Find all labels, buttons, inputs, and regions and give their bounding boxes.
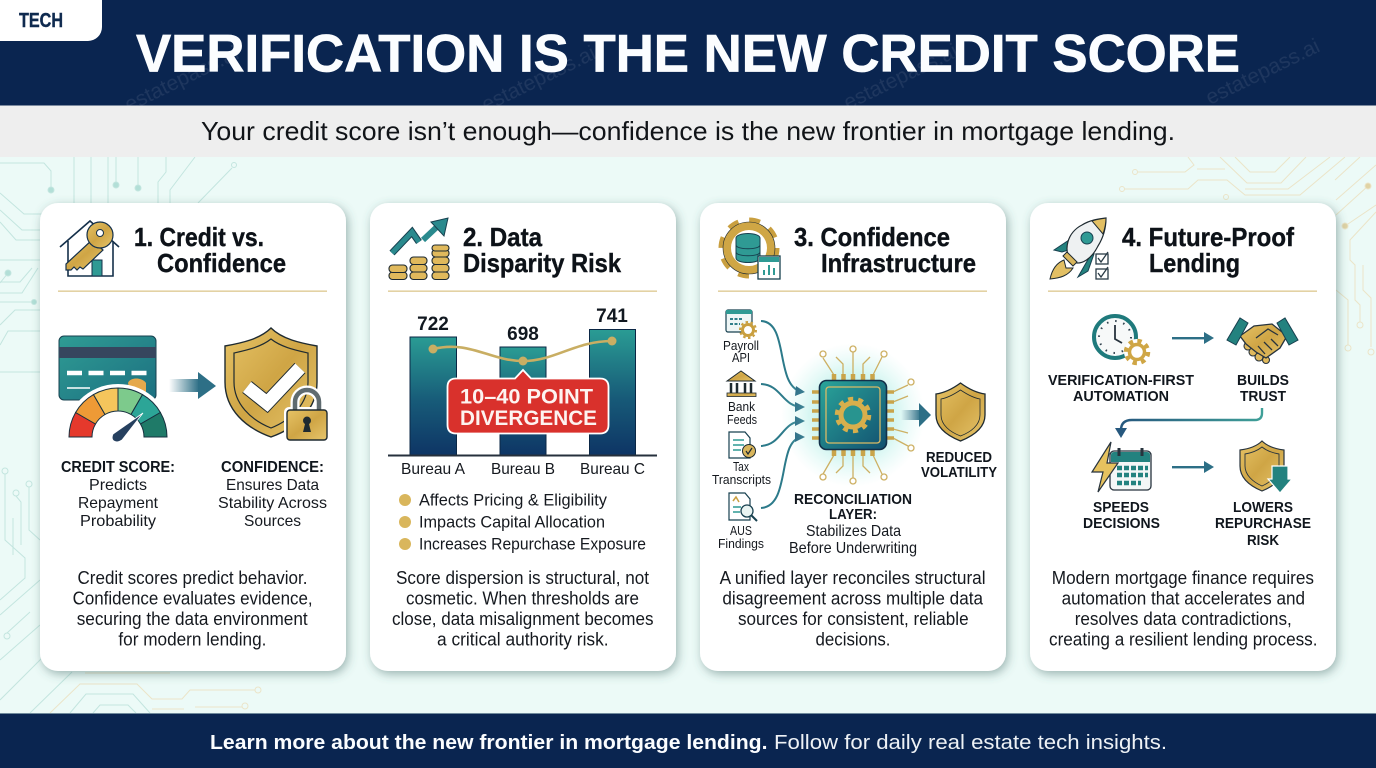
labels: automation and trust: AUTOMATION (1073, 388, 1169, 405)
icon: bank feeds: Feeds (727, 412, 757, 427)
background circuit traces, gold right (50, 157, 1376, 713)
text block 4 (1049, 568, 1318, 650)
label: confidence: Ensures Data (226, 477, 319, 494)
arrows: inputs to chip (761, 321, 805, 508)
label: reconciliation layer (789, 491, 917, 557)
category tab: TECH (0, 0, 102, 41)
label: reconciliation layer: Before Underwriting (789, 540, 917, 557)
label: credit score (61, 459, 175, 530)
bar chart: Bureau B (491, 461, 555, 478)
label: credit score: Probability (80, 513, 156, 530)
watermarks: estatepass.ai (121, 42, 242, 116)
divider (58, 290, 327, 292)
chip: reconciliation layer (781, 343, 925, 487)
watermarks: estatepass.ai (478, 42, 599, 116)
label: confidence: Sources (244, 513, 301, 530)
bullet list: Impacts Capital Allocation (419, 514, 605, 532)
text block 2 (392, 568, 654, 650)
arrow: connector back to second row (1115, 408, 1262, 438)
labels: speeds and lowers: RISK (1247, 532, 1279, 549)
text block 2: close, data misalignment becomes (392, 609, 654, 629)
divider (388, 290, 657, 292)
panel 3: confidence infrastructure (700, 203, 1006, 671)
icon: rocket and checklist (1050, 218, 1108, 279)
icon: AUS findings: Findings (718, 536, 764, 551)
text block 2: cosmetic. When thresholds are (406, 588, 639, 608)
watermarks (121, 35, 1323, 116)
heading 2: 2. Data (463, 222, 542, 252)
text block 3: decisions. (816, 630, 890, 650)
label: reduced volatility: REDUCED (926, 449, 992, 466)
bar chart: 722 (417, 314, 449, 335)
label: reconciliation layer: LAYER: (829, 506, 877, 523)
subtitle band (0, 106, 1376, 157)
icon: payroll API (723, 310, 759, 365)
heading 1: Confidence (157, 248, 286, 278)
icon: AUS findings (718, 493, 764, 551)
bar chart: 741 (596, 306, 628, 327)
labels: automation and trust: BUILDS (1237, 372, 1289, 389)
icon: house and key (60, 221, 119, 276)
background circuit traces, teal left (0, 157, 236, 713)
labels: automation and trust: VERIFICATION-FIRST (1048, 372, 1194, 389)
icon: bank feeds (727, 371, 757, 427)
title: VERIFICATION IS THE NEW CREDIT SCORE (136, 25, 1240, 84)
text block 1 (73, 568, 313, 650)
heading 3: Infrastructure (821, 248, 976, 278)
heading 2: Disparity Risk (463, 248, 621, 278)
bar chart (388, 306, 657, 478)
header band (0, 0, 1376, 106)
labels: automation and trust (1048, 372, 1289, 405)
text block 3: A unified layer reconciles structural (720, 568, 986, 588)
label: confidence: Stability Across (218, 495, 327, 512)
text block 1: securing the data environment (77, 609, 308, 629)
label: reconciliation layer: RECONCILIATION (794, 491, 912, 508)
icon: lightning and calendar (1092, 442, 1151, 492)
heading 2 (463, 222, 621, 278)
heading 4 (1122, 222, 1294, 278)
watermarks: estatepass.ai (840, 40, 961, 114)
text block 2: Score dispersion is structural, not (396, 568, 649, 588)
icon: shield (936, 383, 985, 441)
icon: gear with database (722, 221, 780, 279)
labels: speeds and lowers: SPEEDS (1093, 499, 1149, 516)
icon: tax transcripts: Transcripts (712, 472, 771, 487)
bullet list: Affects Pricing & Eligibility (419, 492, 608, 510)
arrow: chip to shield (901, 403, 931, 427)
panel 1: credit vs confidence (40, 203, 346, 671)
label: reconciliation layer: Stabilizes Data (806, 523, 901, 540)
label: reduced volatility (921, 449, 997, 481)
label: reduced volatility: VOLATILITY (921, 464, 997, 481)
subtitle: Your credit score isn’t enough—confidence is the new frontier in mortgage lending. (201, 116, 1175, 146)
arrow (1172, 461, 1214, 473)
text block 4: Modern mortgage finance requires (1052, 568, 1314, 588)
page background (0, 157, 1376, 713)
icon: tax transcripts: Tax (733, 459, 749, 474)
icon: coins and rising arrow (389, 218, 449, 280)
labels: speeds and lowers (1083, 499, 1311, 549)
divider (1048, 290, 1317, 292)
icon: gold shield with check and lock (225, 328, 330, 443)
label: credit score: CREDIT SCORE: (61, 459, 175, 476)
label: credit score: Predicts (89, 477, 147, 494)
text block 3 (720, 568, 986, 650)
icon: payroll API: Payroll (723, 338, 759, 353)
icon: AUS findings: AUS (730, 523, 752, 538)
bullet list: Increases Repurchase Exposure (419, 536, 646, 554)
heading 4: 4. Future-Proof (1122, 222, 1294, 252)
text block 3: disagreement across multiple data (722, 588, 984, 608)
heading 4: Lending (1149, 248, 1240, 278)
icon: tax transcripts (712, 432, 771, 487)
heading 3: 3. Confidence (794, 222, 950, 252)
labels: speeds and lowers: REPURCHASE (1215, 515, 1311, 532)
callout: point divergence: DIVERGENCE (460, 406, 597, 430)
footer band: Learn more about the new frontier in mortgage lending. (210, 732, 768, 754)
arrow (1172, 332, 1214, 344)
callout: point divergence (448, 370, 608, 434)
divider (718, 290, 987, 292)
text block 4: resolves data contradictions, (1075, 609, 1292, 629)
heading 1 (134, 222, 286, 278)
text block 3: sources for consistent, reliable (738, 609, 969, 629)
icon: handshake (1227, 318, 1298, 364)
bullet list (399, 492, 646, 554)
footer band (0, 713, 1376, 768)
bar chart: Bureau C (580, 461, 645, 478)
icon: credit card with gauge (59, 336, 172, 442)
labels: speeds and lowers: DECISIONS (1083, 515, 1160, 532)
text block 2: a critical authority risk. (437, 630, 609, 650)
panel 4: future-proof lending (1030, 203, 1336, 671)
watermarks: estatepass.ai (1202, 35, 1323, 109)
footer band: Follow for daily real estate tech insights. (774, 732, 1167, 754)
icon: clock with gear (1094, 316, 1150, 365)
bar chart: 698 (507, 324, 539, 345)
text block 1: for modern lending. (118, 630, 266, 650)
labels: automation and trust: TRUST (1240, 388, 1286, 405)
label: confidence: CONFIDENCE: (221, 459, 324, 476)
label: confidence (218, 459, 327, 530)
category tab: TECH: TECH (19, 9, 63, 32)
panel 2: data disparity risk (370, 203, 676, 671)
label: credit score: Repayment (78, 495, 159, 512)
arrow (169, 372, 216, 399)
icon: payroll API: API (732, 350, 750, 365)
bar chart: Bureau A (401, 461, 465, 478)
text block 1: Credit scores predict behavior. (78, 568, 308, 588)
text block 4: creating a resilient lending process. (1049, 630, 1318, 650)
heading 3 (794, 222, 976, 278)
callout: point divergence: 10–40 POINT (460, 384, 593, 408)
text block 4: automation that accelerates and (1062, 588, 1305, 608)
text block 1: Confidence evaluates evidence, (73, 588, 313, 608)
heading 1: 1. Credit vs. (134, 222, 264, 252)
icon: shield with down arrow (1240, 441, 1292, 493)
icon: bank feeds: Bank (728, 399, 755, 414)
labels: speeds and lowers: LOWERS (1233, 499, 1293, 516)
